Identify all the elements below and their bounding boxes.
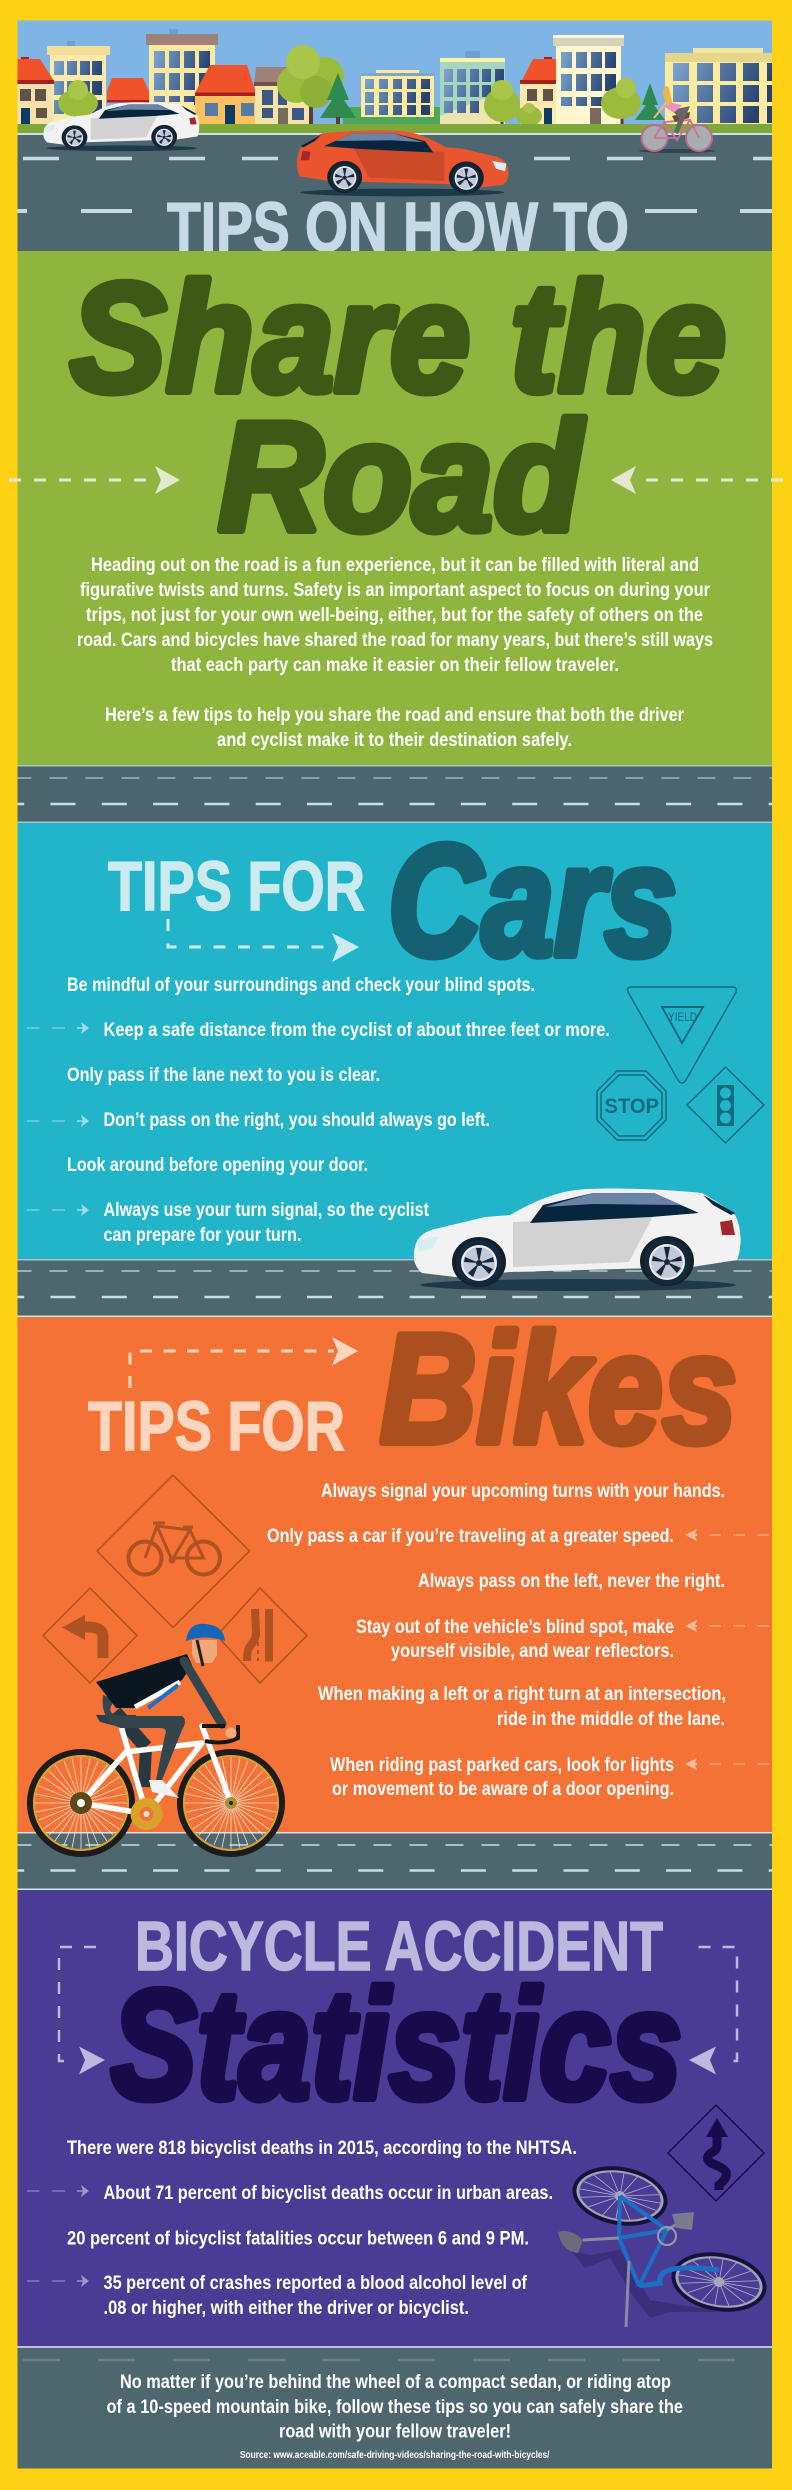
road divider 1 — [18, 765, 772, 823]
icon: left turn sign — [43, 1588, 137, 1683]
icon: orange car — [297, 130, 508, 196]
intro text: Here’s a few tips to help you share the road and ensure that both the driver — [105, 705, 685, 726]
road divider 3 — [18, 1832, 772, 1890]
tip list: Don’t pass on the right, you should always go left. — [104, 1110, 490, 1131]
tip list: Stay out of the vehicle’s blind spot, make — [356, 1617, 674, 1638]
icon: lane merge sign — [217, 1588, 307, 1683]
closing text: of a 10-speed mountain bike, follow these tips so you can safely share the — [106, 2397, 683, 2418]
arrow: heading — [130, 1337, 358, 1388]
icon: traffic signal sign — [687, 1067, 764, 1143]
statistics list: About 71 percent of bicyclist deaths occur in urban areas. — [104, 2183, 553, 2204]
icon: white car — [43, 102, 199, 151]
closing text — [106, 2372, 683, 2442]
tip list: Only pass a car if you’re traveling at a greater speed. — [267, 1526, 674, 1547]
arrow: right bracket — [689, 1947, 737, 2074]
tip list: Be mindful of your surroundings and check your blind spots. — [67, 975, 535, 996]
intro text — [77, 555, 713, 751]
arrow: left — [9, 466, 180, 494]
statistics list: There were 818 bicyclist deaths in 2015, according to the NHTSA. — [67, 2138, 577, 2159]
intro text: trips, not just for your own well-being, either, but for the safety of others on the — [86, 605, 703, 626]
panel: bicycle accident statistics — [18, 1890, 772, 2346]
statistics list: .08 or higher, with either the driver or bicyclist. — [104, 2298, 469, 2319]
tip list — [267, 1481, 726, 1800]
road divider 2 — [18, 1259, 772, 1317]
title: road: Road — [218, 390, 585, 563]
icon: yield sign: YIELD — [668, 1010, 697, 1024]
heading: bikes: Bikes — [380, 1302, 737, 1475]
tip list: ride in the middle of the lane. — [497, 1709, 725, 1730]
icon: cyclist in suit — [30, 1624, 282, 1854]
tip list — [67, 975, 610, 1246]
tip list: Only pass if the lane next to you is clear. — [67, 1065, 380, 1086]
statistics list — [67, 2138, 577, 2319]
heading: cars: Cars — [388, 813, 677, 989]
title: tips on how to: TIPS ON HOW TO — [167, 188, 629, 266]
statistics list: 35 percent of crashes reported a blood alcohol level of — [104, 2273, 528, 2294]
intro text: figurative twists and turns. Safety is an important aspect to focus on during your — [80, 580, 711, 601]
trees — [58, 45, 665, 130]
intro text: and cyclist make it to their destination safely. — [217, 730, 572, 751]
tip list: Always signal your upcoming turns with your hands. — [321, 1481, 725, 1502]
icon: fallen bicycle — [558, 2159, 771, 2327]
tip list: Always pass on the left, never the right. — [418, 1571, 725, 1592]
panel: tips for cars — [18, 813, 772, 1259]
tip list: Always use your turn signal, so the cyclist — [104, 1200, 430, 1221]
icon: stop sign: STOP — [604, 1095, 659, 1118]
panel: introduction — [9, 251, 783, 765]
icon: bicycle sign — [97, 1475, 250, 1628]
heading: tips for: TIPS FOR — [88, 1387, 345, 1465]
buildings row — [18, 29, 772, 125]
statistics list: 20 percent of bicyclist fatalities occur between 6 and 9 PM. — [67, 2228, 529, 2250]
icon: woman on pink bicycle — [639, 86, 715, 153]
heading: tips for: TIPS FOR — [108, 847, 365, 925]
panel: closing message — [18, 2346, 772, 2468]
tip list: When riding past parked cars, look for lights — [330, 1755, 674, 1776]
arrow: heading — [168, 919, 359, 962]
icon: large white car — [414, 1189, 741, 1291]
tip list: When making a left or a right turn at an intersection, — [318, 1684, 726, 1705]
arrow: left bracket — [59, 1947, 105, 2074]
tip list: can prepare for your turn. — [104, 1225, 302, 1246]
source: Source: www.aceable.com/safe-driving-videos/sharing-the-road-with-bicycles/ — [240, 2450, 550, 2461]
small arrows — [27, 2185, 89, 2287]
intro text: that each party can make it easier on their fellow traveler. — [171, 655, 619, 676]
tip list: yourself visible, and wear reflectors. — [391, 1641, 674, 1662]
heading: statistics: Statistics — [111, 1958, 682, 2131]
panel: street scene header — [18, 20, 772, 266]
panel: tips for bikes — [18, 1302, 772, 1832]
grass strip — [18, 124, 772, 133]
small arrows — [685, 1529, 769, 1770]
icon: stop sign — [597, 1071, 666, 1140]
tip list: Look around before opening your door. — [67, 1155, 368, 1176]
icon: winding road sign — [668, 2105, 764, 2201]
tip list: Keep a safe distance from the cyclist of about three feet or more. — [104, 1020, 610, 1041]
tip list: or movement to be aware of a door opening. — [332, 1779, 674, 1800]
road with lane dashes — [18, 133, 772, 251]
closing text: No matter if you’re behind the wheel of a compact sedan, or riding atop — [120, 2372, 671, 2393]
arrow: right — [611, 466, 783, 494]
intro text: Heading out on the road is a fun experience, but it can be filled with literal and — [91, 555, 699, 576]
closing text: road with your fellow traveler! — [279, 2422, 511, 2442]
title: share the: Share the — [70, 251, 726, 424]
icon: yield sign — [628, 987, 736, 1083]
small arrows — [27, 1022, 89, 1216]
